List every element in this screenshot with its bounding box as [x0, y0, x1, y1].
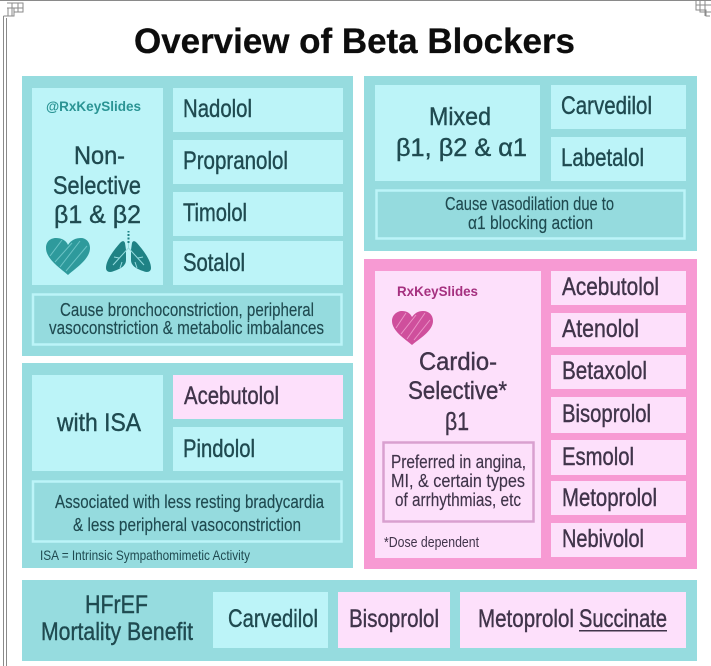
drug: Carvedilol: Carvedilol [561, 92, 652, 120]
footnote: ISA definition: ISA = Intrinsic Sympathomimetic Activity [40, 547, 250, 563]
note: cardio-selective uses: MI, & certain types [391, 471, 525, 491]
drug: Sotalol [173, 241, 343, 285]
icon: teal heart [46, 238, 90, 275]
note: cardio-selective uses: of arrhythmias, etc [395, 490, 521, 510]
panel: with ISA [22, 363, 353, 568]
note: ISA effects [33, 482, 342, 542]
drug: Propranolol: Propranolol [183, 147, 288, 175]
category label: Non-Selective β1 & β2: β1 & β2 [54, 201, 141, 229]
panel: mixed [364, 76, 697, 251]
icon: lungs [106, 231, 151, 272]
drug: Metoprolol: Metoprolol [562, 484, 657, 512]
category label: Cardio-Selective β1: Cardio- [419, 348, 497, 376]
drug: Carvedilol [213, 592, 328, 648]
note: ISA effects: Associated with less resting bradycardia [55, 492, 325, 512]
drug: Metoprolol Succinate: Metoprolol [478, 605, 574, 633]
drug: Atenolol [551, 313, 686, 347]
note: non-selective effects: vasoconstriction & metabolic imbalances [49, 318, 324, 338]
drug: Timolol [173, 192, 343, 236]
panel: HFrEF mortality benefit [22, 580, 697, 661]
category label: Non-Selective β1 & β2 [53, 142, 141, 229]
panel: non-selective [22, 76, 353, 356]
category box: with ISA [32, 375, 163, 471]
note: mixed effects: Cause vasodilation due to [445, 194, 614, 214]
drug: Esmolol: Esmolol [562, 443, 634, 471]
category box: mixed: Mixed [429, 103, 491, 131]
note: ISA effects: & less peripheral vasoconstriction [73, 515, 301, 535]
drug: Betaxolol: Betaxolol [562, 357, 647, 385]
drug: Bisoprolol: Bisoprolol [562, 400, 651, 428]
drug: Acebutolol [173, 375, 343, 419]
note: non-selective effects: Cause bronchoconstriction, peripheral [60, 300, 314, 320]
note: cardio-selective uses [384, 442, 534, 522]
drug: Nadolol [173, 88, 343, 132]
category label: Non-Selective β1 & β2: Non- [74, 142, 125, 170]
drug: Labetalol [551, 137, 686, 181]
drug: Metoprolol Succinate [460, 592, 686, 648]
drug: Propranolol [173, 140, 343, 184]
category box: with ISA: with ISA [56, 409, 141, 437]
drug: Pindolol: Pindolol [183, 435, 255, 463]
drug: Labetalol: Labetalol [561, 144, 644, 172]
drug: Carvedilol [551, 85, 686, 129]
heading: HFrEF Mortality Benefit [41, 591, 193, 646]
category box: cardio-selective [375, 271, 541, 558]
drug: Esmolol [551, 440, 686, 475]
category box: mixed [375, 85, 540, 181]
handle: RxKeySlides: RxKeySlides [397, 283, 478, 299]
category box: mixed: β1, β2 & α1 [396, 134, 527, 162]
drug: Sotalol: Sotalol [183, 249, 245, 277]
note: non-selective effects [33, 294, 342, 344]
drug: Timolol: Timolol [183, 199, 247, 227]
category label: Cardio-Selective β1: β1 [445, 408, 469, 436]
drug: Bisoprolol [551, 397, 686, 433]
heading: HFrEF Mortality Benefit: HFrEF [85, 591, 148, 619]
note: mixed effects [376, 190, 684, 238]
drug: Carvedilol: Carvedilol [228, 605, 318, 633]
drug: Nadolol: Nadolol [183, 95, 252, 123]
drug: Betaxolol [551, 355, 686, 389]
icon: pink heart [392, 311, 433, 345]
note: cardio-selective uses: Preferred in angina, [391, 452, 526, 472]
drug: Acebutolol: Acebutolol [562, 273, 659, 301]
handle: @RxKeySlides: @RxKeySlides [46, 98, 141, 114]
drug: Nebivolol: Nebivolol [562, 525, 644, 553]
category box: non-selective [32, 88, 163, 285]
note: mixed effects: α1 blocking action [468, 213, 593, 233]
category label: Cardio-Selective β1 [408, 348, 507, 436]
category label: Cardio-Selective β1: Selective* [408, 377, 507, 405]
drug: Bisoprolol: Bisoprolol [349, 605, 439, 633]
panel: cardio-selective [364, 259, 697, 569]
category label: Non-Selective β1 & β2: Selective [53, 172, 141, 200]
footnote: dose dependent: *Dose dependent [384, 534, 480, 551]
drug: Pindolol [173, 427, 343, 471]
drug: Nebivolol [551, 523, 686, 557]
drug: Atenolol: Atenolol [562, 315, 639, 343]
heading: HFrEF Mortality Benefit: Mortality Benefit [41, 618, 193, 646]
drug: Bisoprolol [338, 592, 450, 648]
drug: Metoprolol Succinate: Succinate [579, 605, 667, 633]
drug: Acebutolol: Acebutolol [184, 382, 279, 410]
title: Overview of Beta Blockers [134, 22, 575, 61]
